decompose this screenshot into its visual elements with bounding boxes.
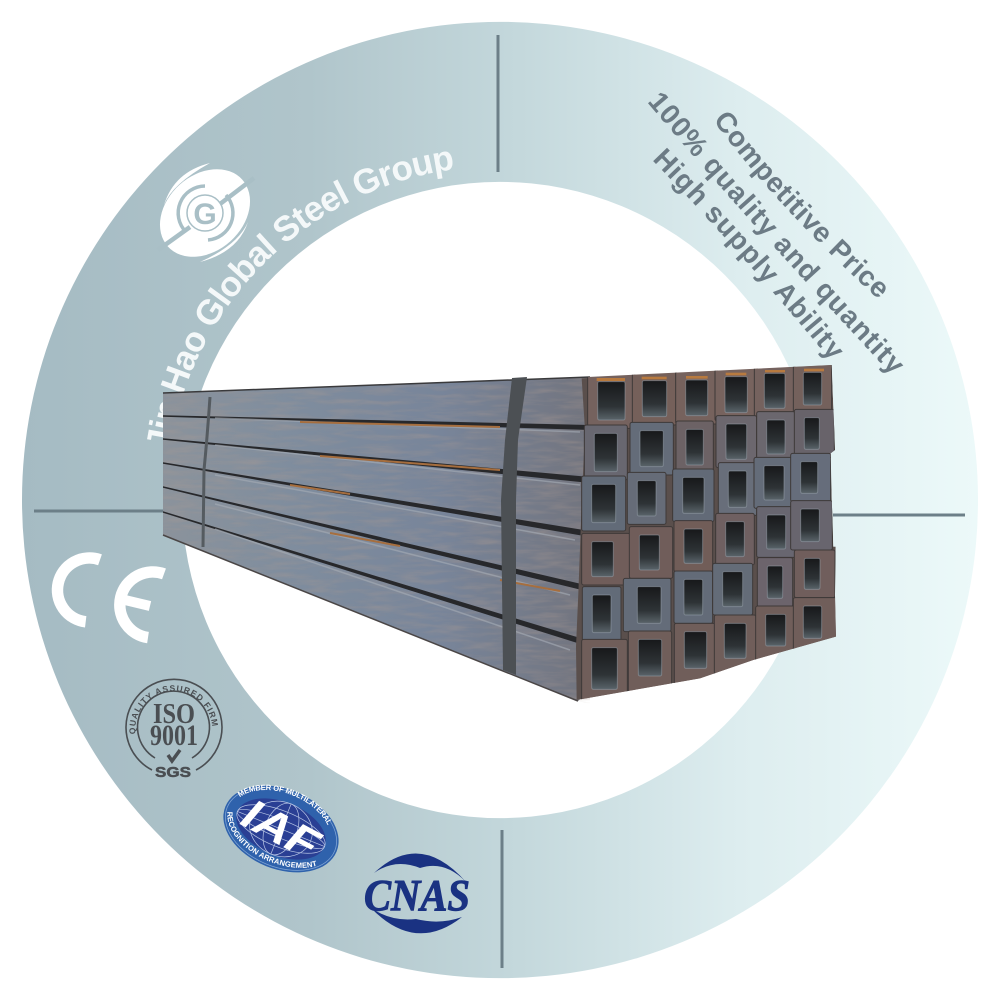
icon: company logo: G — [193, 198, 217, 231]
icon: ISO 9001 SGS badge: ISO — [153, 698, 195, 730]
icon: ISO 9001 SGS badge: 9001 — [150, 719, 198, 752]
front face with channel openings — [576, 360, 837, 713]
text block: selling points: 100% quality and quantity — [648, 92, 904, 373]
left strap — [203, 397, 210, 547]
icon: ISO 9001 SGS badge — [125, 678, 223, 781]
icon: company logo — [142, 151, 268, 275]
icon: IAF badge: RECOGNITION ARRANGEMENT — [227, 812, 316, 868]
bundle of steel channels — [163, 360, 837, 713]
channel frames — [582, 360, 837, 713]
icon: IAF badge — [223, 784, 339, 872]
icon: CNAS badge — [364, 854, 470, 933]
right strap — [501, 377, 527, 675]
icon: ISO 9001 SGS badge: QUALITY ASSURED FIRM — [129, 685, 218, 734]
text block: selling points: Competitive Price — [716, 112, 886, 297]
icon: IAF badge: IAF — [234, 790, 329, 871]
text block: selling points: High supply Ability — [653, 148, 843, 358]
side faces of the channels — [163, 377, 590, 704]
channel openings — [592, 372, 822, 689]
icon: IAF badge: MEMBER OF MULTILATERAL — [238, 784, 331, 826]
orange top rims — [597, 369, 824, 381]
title: curved company name: Jin Hao Global Steel Group — [147, 152, 452, 440]
icon: CE mark — [57, 558, 164, 638]
icon: CNAS badge: CNAS — [364, 871, 470, 920]
icon: ISO 9001 SGS badge: SGS — [155, 764, 191, 781]
